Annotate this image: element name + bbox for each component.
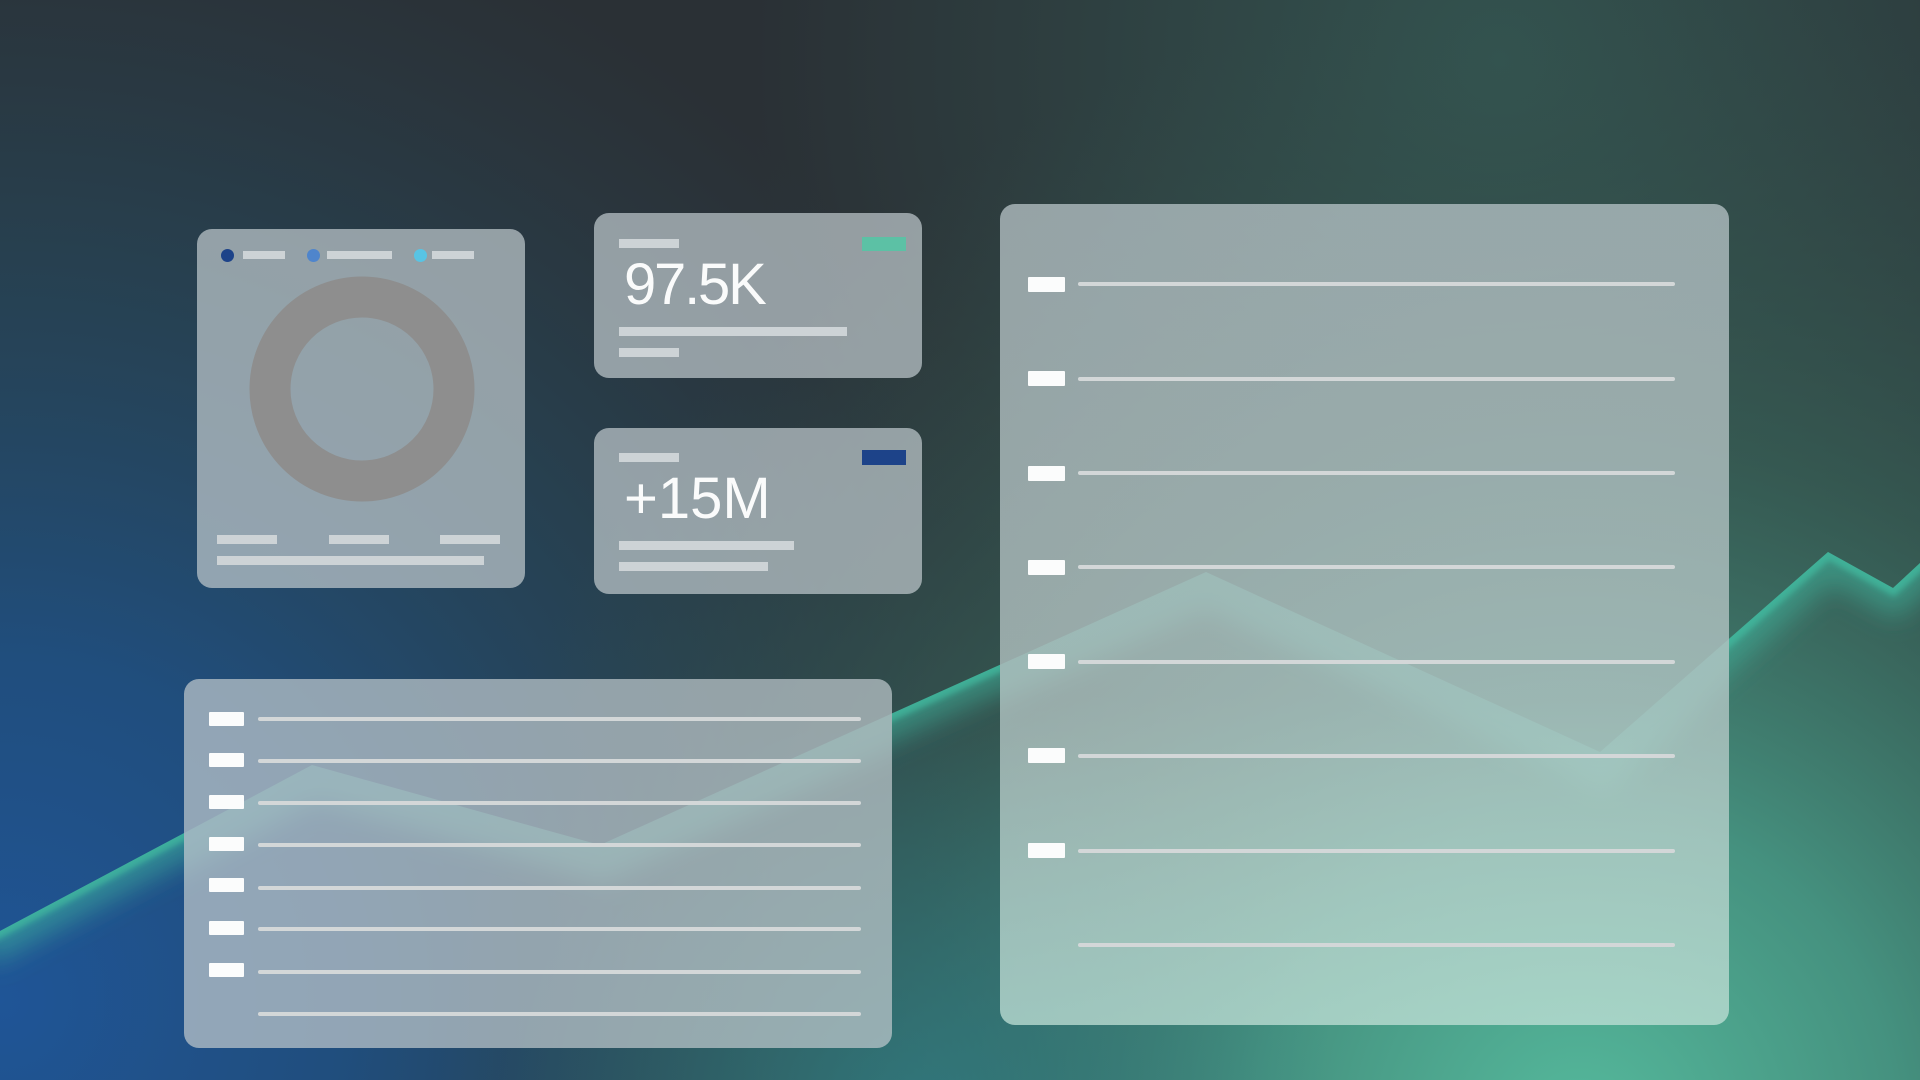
panel: KPI +15M [594,428,922,594]
footer bars [217,535,500,565]
panel: KPI 97.5K [594,213,922,378]
legend [221,249,474,262]
tag: blue [862,450,906,465]
panel: right table [1000,204,1729,1025]
value: 97.5K [624,252,765,317]
panel: donut chart [197,229,525,588]
panel: bottom table [184,679,892,1048]
tag: green [862,237,906,251]
area chart line glow [0,545,1920,941]
donut ring [250,276,474,502]
value: +15M [624,466,771,531]
